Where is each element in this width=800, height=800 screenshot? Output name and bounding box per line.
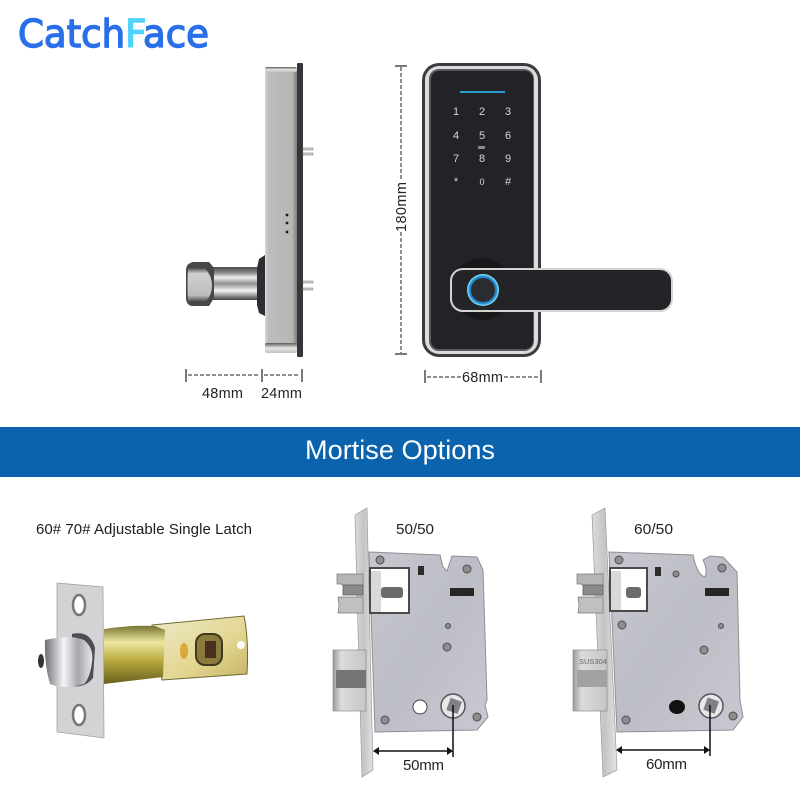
spring (381, 587, 403, 598)
latch tip (38, 654, 44, 668)
brass cylinder (104, 626, 165, 684)
face plate (592, 508, 617, 777)
caption: 60/50: 60/50 (634, 521, 673, 538)
keypad: # (505, 176, 512, 188)
spring (626, 587, 641, 598)
latch bolt (45, 637, 92, 687)
latch top claw (337, 574, 363, 587)
LED strip (460, 91, 505, 93)
measure arrow (373, 747, 453, 755)
screws (615, 556, 737, 724)
screws (376, 556, 481, 724)
face plate (355, 508, 373, 777)
caption: single latch: 60# 70# Adjustable Single Latch (36, 521, 252, 538)
latch slider (611, 571, 621, 610)
handle rose (451, 258, 513, 320)
body (609, 552, 743, 732)
latch inner square (205, 641, 216, 658)
card reader mark (478, 146, 485, 149)
silver trim (425, 66, 538, 354)
body bottom cap (265, 343, 297, 353)
handle rose (257, 255, 265, 316)
body (369, 552, 488, 732)
spindle hole (441, 694, 465, 718)
dimension: 68mm (425, 370, 541, 386)
oval hole (413, 700, 427, 714)
spring window (610, 568, 647, 611)
tail round hole (237, 641, 245, 649)
lever handle (451, 269, 672, 311)
keypad: 9 (505, 153, 511, 165)
spring window (370, 568, 409, 613)
small brass hole (180, 643, 188, 659)
spindle hole (699, 694, 723, 718)
oval hole (669, 700, 685, 714)
single latch image (38, 583, 248, 738)
latch slider (371, 571, 381, 612)
back plate (297, 63, 303, 357)
handle shaft (210, 267, 257, 300)
front view of lock (422, 63, 672, 357)
dimensions: 48mm and 24mm: 24mm (261, 386, 302, 402)
face plate (57, 583, 104, 738)
side view of lock (186, 63, 313, 357)
small slot (418, 566, 424, 575)
handle head (186, 262, 214, 306)
keypad: * (454, 176, 459, 188)
keypad: 3 (505, 106, 511, 118)
latch top claw (577, 574, 603, 587)
measure line (709, 705, 711, 756)
keypad: 5 (479, 130, 485, 142)
lock body (265, 67, 297, 353)
front panel (431, 71, 533, 349)
square spindle (446, 698, 462, 714)
inner dark edge (429, 69, 534, 351)
brass tail plate (152, 616, 248, 680)
label: 60mm: 60mm (646, 756, 687, 773)
outer frame (422, 63, 541, 357)
keypad: 4 (453, 130, 459, 142)
label: 50mm: 50mm (403, 757, 444, 774)
keypad (453, 106, 512, 188)
SUS304 mark: SUS304 (579, 657, 607, 666)
small slot (655, 567, 661, 576)
caption: 50/50: 50/50 (396, 521, 434, 538)
keypad: 2 (479, 106, 485, 118)
body dots (286, 214, 288, 233)
slot (705, 588, 729, 596)
keypad: 6 (505, 130, 511, 142)
banner: Mortise Options (0, 427, 800, 477)
dead bolt gap (577, 670, 607, 687)
logo: CatchFace: CatchFace (18, 12, 209, 56)
latch middle bar (583, 585, 603, 595)
banner: Mortise Options: Mortise Options (305, 435, 495, 465)
lower screw hole (73, 705, 85, 725)
dead bolt gap (336, 670, 366, 688)
keypad: 7 (453, 153, 459, 165)
dimension: 68mm: 68mm (462, 370, 503, 386)
latch square hole (196, 634, 222, 665)
mortise lock 50/50 (333, 508, 488, 777)
dimensions: 48mm and 24mm: 48mm (202, 386, 243, 402)
dimensions: 48mm and 24mm (186, 369, 302, 402)
keypad: 1 (453, 106, 459, 118)
dimension: 180mm: 180mm (394, 182, 410, 232)
mortise lock 60/50 (573, 508, 743, 777)
fingerprint ring (467, 274, 499, 306)
measure line (452, 705, 454, 757)
body top cap (265, 67, 297, 72)
latch bottom claw (578, 597, 603, 613)
mounting pins (303, 148, 313, 290)
dead bolt (333, 650, 366, 711)
latch recess (72, 633, 95, 686)
latch middle bar (343, 585, 363, 595)
keypad: 0 (479, 177, 485, 187)
handle head face (188, 268, 212, 302)
upper screw hole (73, 595, 85, 615)
dead bolt (573, 650, 607, 711)
measure arrow (616, 746, 710, 754)
latch bottom claw (338, 597, 363, 613)
keypad: 8 (479, 153, 485, 165)
fingerprint sensor (471, 278, 495, 302)
slot (450, 588, 474, 596)
square spindle (703, 697, 719, 714)
